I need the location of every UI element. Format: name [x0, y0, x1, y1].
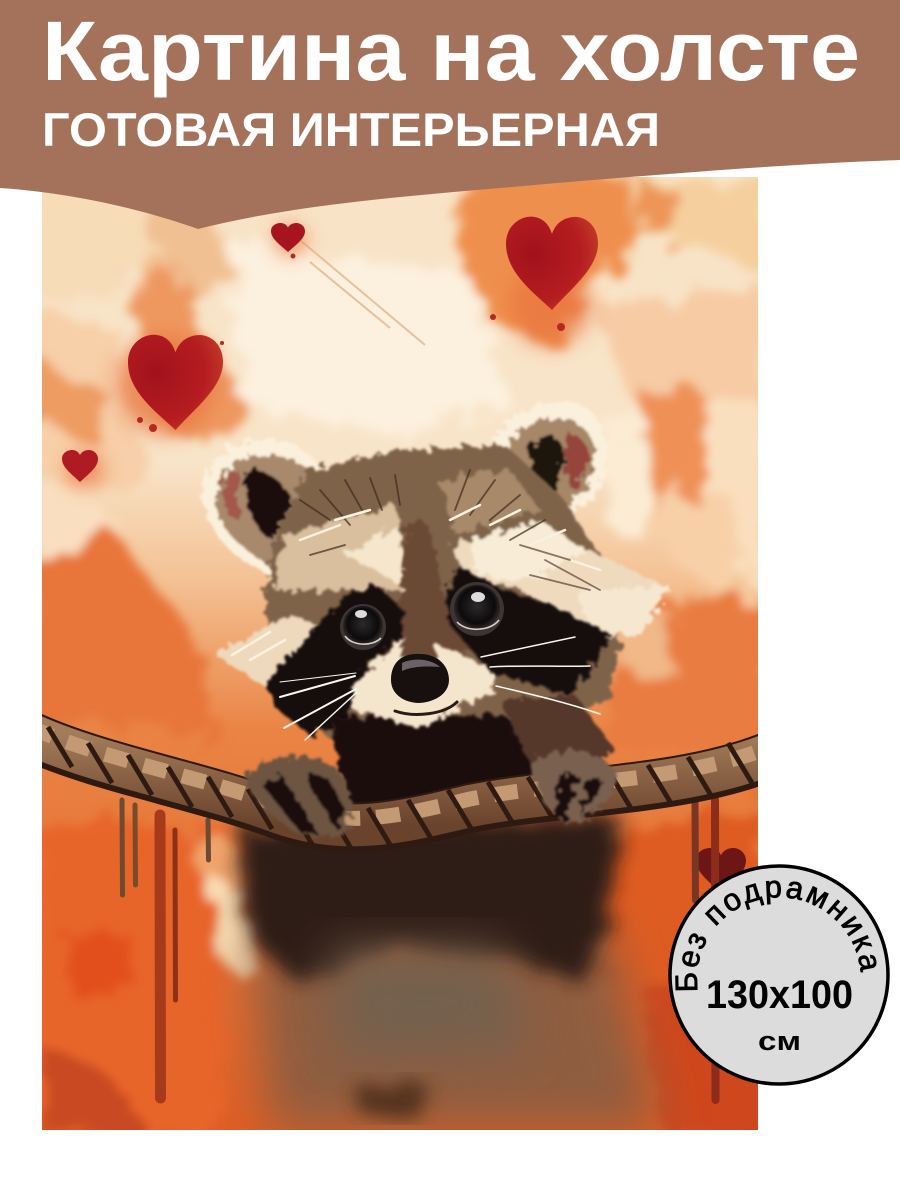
subtitle: ГОТОВАЯ ИНТЕРЬЕРНАЯ: [42, 103, 660, 156]
heart: dark lower right: [698, 848, 746, 884]
right paw: [528, 750, 617, 824]
badge: size: [668, 864, 890, 1086]
left eye: [340, 604, 386, 650]
chest dark fur: [330, 710, 534, 802]
header banner: [0, 0, 900, 229]
rope strands: [48, 727, 752, 850]
badge unit: см: [758, 1026, 801, 1056]
badge: size: Без подрамника: [675, 880, 876, 990]
muzzle: [350, 636, 495, 729]
panel: raccoon painting: [30, 170, 770, 1140]
fur strokes: [232, 470, 600, 660]
raccoon body: [235, 815, 660, 1130]
centre stripe: [384, 518, 470, 658]
painting base colour: [42, 177, 758, 1130]
nose: [391, 654, 449, 703]
right eye mask: [447, 568, 612, 696]
brush scratch: [300, 240, 425, 345]
right eye: [450, 582, 504, 636]
badge curved text: [697, 897, 861, 992]
whiskers: [280, 637, 600, 740]
left eye mask: [268, 585, 405, 735]
left ear: [203, 439, 333, 585]
heart: left: [128, 335, 223, 430]
rope: [30, 727, 770, 850]
paint drips from rope: [122, 800, 716, 1100]
heart glow: [67, 225, 590, 488]
paint splashes: [137, 254, 565, 432]
badge size: 130x100: [706, 973, 853, 1017]
head fur: [215, 445, 672, 745]
painted background strokes: [30, 170, 770, 1140]
right ear: [490, 402, 607, 525]
mouth: [395, 702, 457, 714]
hearts: [62, 217, 746, 893]
heart: small top: [271, 223, 305, 252]
title: Картина на холсте: [42, 4, 860, 98]
raccoon head: [203, 402, 672, 815]
badge circle: [670, 866, 888, 1084]
left paw: [244, 756, 351, 838]
heart: top right: [506, 217, 598, 310]
heart: small left: [62, 450, 98, 482]
